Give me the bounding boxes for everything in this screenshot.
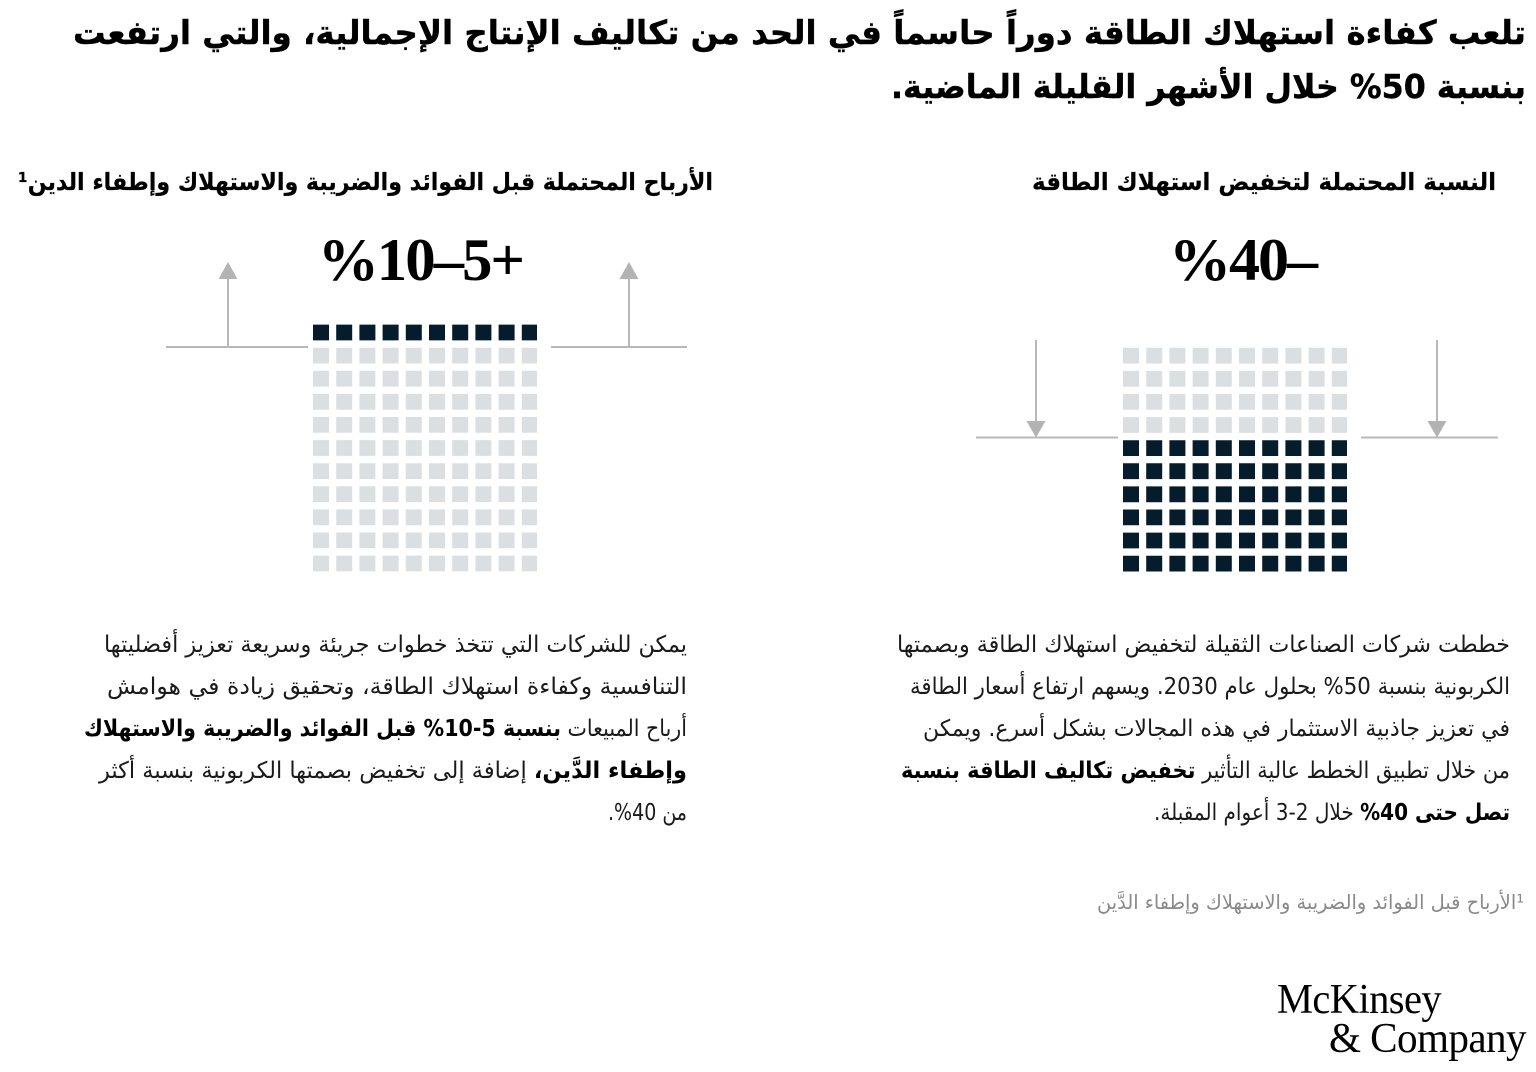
logo: McKinsey & Company: McKinsey [1277, 977, 1442, 1023]
body text: energy reduction: من خلال تطبيق الخطط عالية التأثير تخفيض تكاليف الطاقة بنسبة [901, 754, 1510, 784]
body text: EBITDA: يمكن للشركات التي تتخذ خطوات جريئة وسريعة تعزيز أفضليتها [104, 629, 687, 658]
body text: EBITDA: من 40%. [608, 800, 687, 826]
heading: energy reduction: النسبة المحتملة لتخفيض استهلاك الطاقة [1032, 168, 1496, 196]
big number: plus 5-10 percent: %10–5+ [318, 227, 523, 293]
body text: energy reduction: تصل حتى 40% خلال 2-3 أعوام المقبلة. [1154, 797, 1510, 826]
body text: EBITDA [84, 629, 687, 826]
waffle chart: 10 of 100 dark [313, 332, 537, 564]
title [73, 9, 1526, 107]
panel: energy consumption reduction [897, 168, 1510, 826]
body text: EBITDA: التنافسية وكفاءة استهلاك الطاقة، وتحقيق زيادة في هوامش [107, 674, 687, 700]
logo: McKinsey & Company: & Company [1329, 1016, 1527, 1062]
panel: potential EBITDA [18, 167, 713, 826]
body text: energy reduction [897, 632, 1510, 826]
body text: EBITDA: أرباح المبيعات بنسبة 5-10% قبل الفوائد والضريبة والاستهلاك [84, 713, 687, 742]
title: بنسبة 50% خلال الأشهر القليلة الماضية. [891, 66, 1526, 107]
title: تلعب كفاءة استهلاك الطاقة دوراً حاسماً في الحد من تكاليف الإنتاج الإجمالية، والتي ارتفعت [73, 9, 1526, 53]
body text: energy reduction: خططت شركات الصناعات الثقيلة لتخفيض استهلاك الطاقة وبصمتها [897, 632, 1510, 658]
arrow: up right [551, 262, 687, 347]
body text: energy reduction: الكربونية بنسبة 50% بحلول عام 2030. ويسهم ارتفاع أسعار الطاقة [910, 671, 1510, 700]
body text: energy reduction: في تعزيز جاذبية الاستثمار في هذه المجالات بشكل أسرع. ويمكن [923, 713, 1510, 742]
waffle chart: 60 of 100 dark [1123, 356, 1347, 564]
arrow: down right [1361, 340, 1498, 438]
logo: McKinsey & Company [1277, 977, 1527, 1062]
footnote: ¹الأرباح قبل الفوائد والضريبة والاستهلاك وإطفاء الدَّين [1097, 890, 1524, 915]
arrow: up left [166, 262, 308, 347]
big number: minus 40 percent: %40– [1169, 227, 1319, 293]
arrow: down left [976, 340, 1118, 438]
body text: EBITDA: وإطفاء الدَّين، إضافة إلى تخفيض بصمتها الكربونية بنسبة أكثر [98, 755, 687, 784]
heading: EBITDA: الأرباح المحتملة قبل الفوائد والضريبة والاستهلاك وإطفاء الدين¹ [18, 167, 713, 196]
